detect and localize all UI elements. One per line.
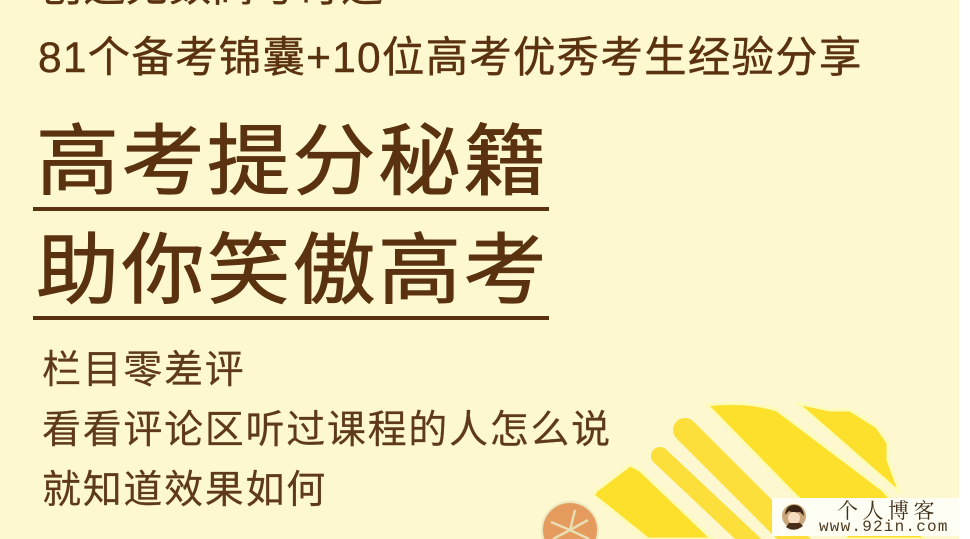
watermark: Chinese label: 个人博客 <box>837 495 939 525</box>
text: subtitle line: 81个备考锦囊+10位高考优秀考生经验分享 <box>38 35 863 82</box>
heading: line one: 高考提分秘籍 <box>36 118 549 205</box>
watermark: URL: www.92in.com <box>819 518 949 536</box>
icon: lemon rind segments <box>660 430 805 539</box>
watermark badge <box>772 498 959 536</box>
text: description block: 看看评论区听过课程的人怎么说 <box>42 409 612 452</box>
heading: line two: 助你笑傲高考 <box>36 227 549 314</box>
icon: orange slice <box>542 502 598 539</box>
text: description block: 就知道效果如何 <box>42 469 327 512</box>
icon: lemon slice stripes <box>593 403 925 539</box>
divider under heading line two <box>33 316 549 320</box>
icon: watermark avatar <box>782 504 806 530</box>
divider under heading line one <box>33 207 549 211</box>
text: description block: 栏目零差评 <box>42 349 246 392</box>
text: description block <box>42 349 612 512</box>
